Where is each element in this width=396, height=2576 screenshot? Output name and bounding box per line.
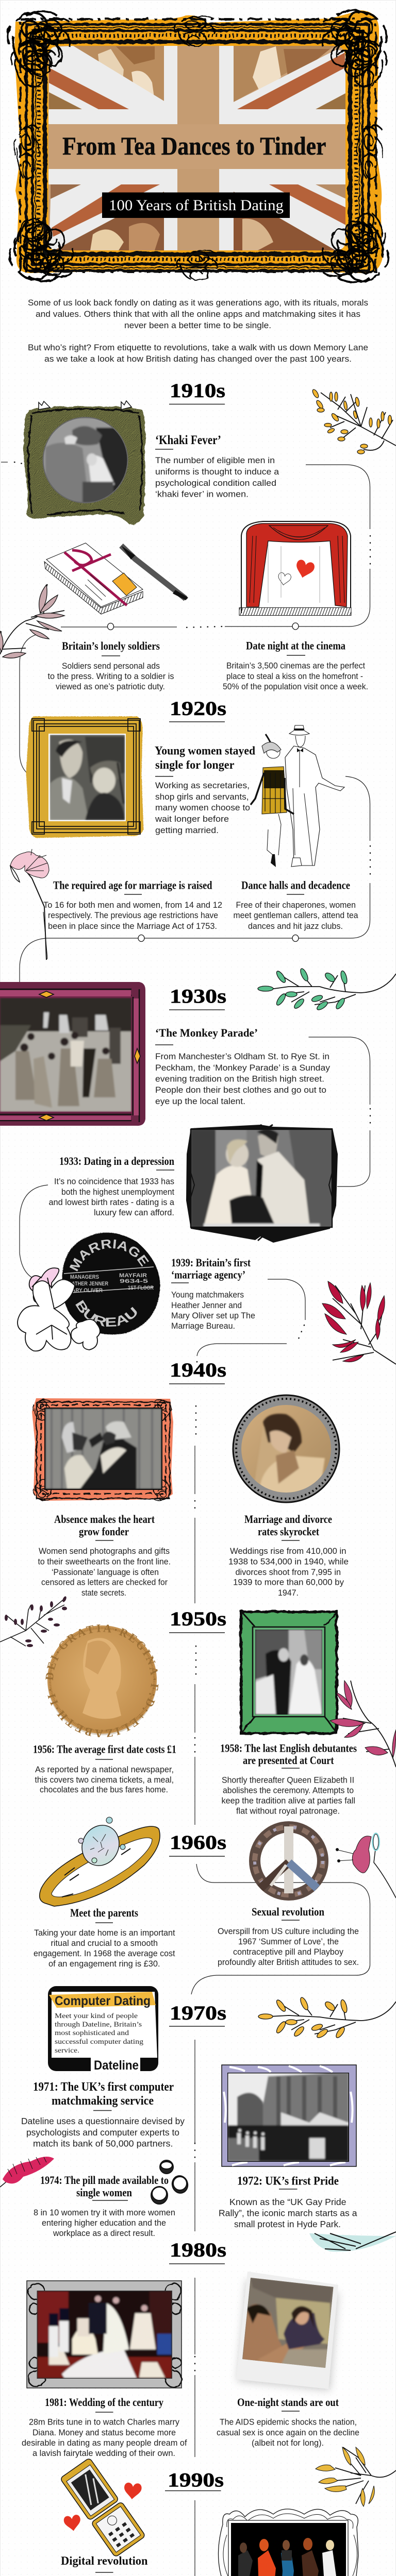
text: marriage and divorce rates [228, 1513, 349, 1598]
text: Britain's first marriage agency: 1939: Britain’s first [171, 1256, 251, 1269]
text: Britain's first marriage agency: Heather Jenner and [171, 1301, 242, 1310]
computer dating advert: successful computer dating [55, 2038, 143, 2045]
text: The Monkey Parade: evening tradition on the British high street. [155, 1075, 324, 1084]
timeline connector 1980s [194, 2278, 195, 2457]
text: one-night stands: (albeit not for long). [252, 2438, 324, 2448]
photo frame: Dating in a depression [186, 1125, 338, 1243]
decade heading 1950s: 1950s [170, 1608, 226, 1630]
text: 1972 first Pride [219, 2174, 357, 2229]
text: 1972 first Pride: 1972: UK’s first Pride [237, 2174, 339, 2188]
text: sexual revolution: profoundly alter British attitudes to sex. [218, 1958, 359, 1967]
text: meet the parents: Meet the parents [70, 1906, 138, 1919]
Union Jack flag panel [48, 44, 346, 250]
section: 1910s [0, 380, 396, 772]
text: Britain's first marriage agency: Marriage Bureau. [171, 1321, 235, 1331]
text: sexual revolution [218, 1905, 359, 1967]
section: 1930s [0, 968, 396, 1369]
text: marriage and divorce rates: Marriage and divorce [244, 1513, 332, 1526]
text: 1958 last debutantes: flat without royal patronage. [236, 1806, 340, 1816]
intro text: never been a better time to be single. [124, 321, 271, 330]
text: 1974 the pill: entering higher education and the [42, 2218, 166, 2228]
title: From Tea Dances to Tinder [62, 132, 326, 161]
text: 1933 depression: and lowest birth rates - dating is a [48, 1198, 175, 1207]
section: 1980s [22, 2232, 396, 2458]
text: Britain's lonely soldiers: Britain’s lonely soldiers [62, 639, 160, 652]
text: one-night stands: casual sex is once again on the decline [217, 2428, 359, 2437]
timeline connector 1920s [20, 776, 370, 984]
text: sexual revolution: contraceptive pill and Playboy [233, 1947, 344, 1957]
text: 1981 wedding of the century [22, 2396, 187, 2458]
text: 1958 last debutantes: 1958: The last English debutantes [220, 1741, 357, 1755]
intro text: Some of us look back fondly on dating as it was generations ago, with its rituals, morals [28, 298, 368, 308]
text: absence makes the heart: grow fonder [79, 1525, 129, 1538]
illustration: Marriage Bureau sign with flowers: MARY OLIVER [68, 1287, 103, 1294]
text: absence makes the heart: state secrets. [81, 1588, 126, 1598]
text: Young women stayed single: wait longer before [155, 815, 229, 824]
text: meet the parents: ritual and crucial to a smooth [51, 1939, 158, 1948]
text: marriage and divorce rates: 1939 to more than 60,000 by [233, 1578, 344, 1587]
photo: polaroid car conversation [236, 2272, 338, 2391]
text: 1956 first date: chocolates and the bus fares home. [40, 1785, 168, 1794]
text: Date night at the cinema: Date night at the cinema [246, 639, 345, 652]
text: Date night at the cinema: place to steal a kiss on the homefront - [226, 672, 363, 681]
text: Britain's lonely soldiers: viewed as one’s patriotic duty. [56, 682, 165, 691]
text: meet the parents [34, 1906, 175, 1969]
text: The Monkey Parade [155, 1026, 331, 1106]
icon: pink flower and bud [336, 1833, 396, 1898]
text: marriage age raised [43, 879, 222, 931]
photo frame: green debutante [240, 1611, 336, 1733]
text: marriage and divorce rates: Weddings rise from 410,000 in [230, 1547, 346, 1556]
intro text: But who’s right? From etiquette to revolutions, take a walk with us down Memory Lane [28, 343, 368, 352]
text: Britain's lonely soldiers [47, 639, 174, 691]
subtitle banner: 100 Years of British Dating [109, 197, 284, 214]
text: one-night stands: One-night stands are out [237, 2396, 339, 2409]
text: Khaki Fever: psychological condition called [155, 479, 276, 488]
illustration: cinema curtains [239, 521, 351, 615]
text: marriage age raised: The required age for marriage is raised [53, 879, 212, 891]
text: marriage and divorce rates: 1938 to 534,000 in 1940, while [228, 1557, 349, 1566]
text: 1958 last debutantes: Shortly thereafter Queen Elizabeth II [222, 1775, 354, 1785]
text: 1981 wedding of the century: Diana. Money and status become more [32, 2428, 176, 2437]
section: 1920s [10, 698, 370, 984]
icon: yellow branch [311, 388, 396, 454]
text: Date night at the cinema: Britain’s 3,500 cinemas are the perfect [226, 662, 365, 671]
text: dance halls: dances and hit jazz clubs. [248, 922, 343, 931]
text: The Monkey Parade: People don their best clothes and go out to [155, 1086, 326, 1095]
text: 1981 wedding of the century: a lavish fairytale wedding of their own. [32, 2449, 175, 2458]
text: sexual revolution: 1967 ‘Summer of Love’, the [238, 1937, 339, 1946]
text: Young women stayed single: single for longer [155, 758, 234, 771]
text: dance halls: meet gentleman callers, attend tea [233, 911, 358, 920]
text: marriage age raised: To 16 for both men and women, from 14 and 12 [43, 901, 222, 910]
text: absence makes the heart: Absence makes the heart [54, 1513, 155, 1526]
photo frame: Spice Girls [219, 2509, 360, 2576]
timeline connector 1910s [1, 462, 370, 772]
text: 1971 computer matchmaking [21, 2080, 185, 2148]
text: Young women stayed single: Working as secretaries, [155, 781, 250, 790]
section: 1960s [34, 1817, 396, 1994]
decade heading 1970s: 1970s [170, 2002, 226, 2024]
intro text: and values. Others think that with all the online apps and matchmaking sites it has [36, 310, 360, 319]
icon: small dark branch [0, 1596, 67, 1647]
computer dating advert: Meet your kind of people [55, 2012, 138, 2020]
text: 1971 computer matchmaking: psychologists and computer experts to [26, 2127, 179, 2138]
photo frame: Monkey Parade [0, 982, 145, 1126]
text: dance halls: Dance halls and decadence [241, 879, 350, 891]
icon: crimson branch [322, 1281, 396, 1364]
illustration: engagement ring [40, 1817, 160, 1906]
text: 1972 first Pride: small protest in Hyde Park. [234, 2219, 341, 2229]
text: marriage and divorce rates: 1947. [278, 1588, 299, 1598]
text: Britain's first marriage agency [171, 1256, 255, 1331]
illustration: Marriage Bureau sign with flowers: HEATHER JENNER [65, 1281, 108, 1287]
photo frame: Khaki Fever [23, 401, 145, 524]
decade heading 1910s: 1910s [170, 380, 225, 402]
text: 1958 last debutantes [220, 1741, 357, 1816]
text: Young women stayed single: shop girls and servants, [155, 792, 249, 802]
text: digital revolution: Digital revolution [61, 2554, 148, 2567]
icon: yellow branch 1970s [258, 1996, 396, 2039]
decade heading 1990s: 1990s [168, 2469, 224, 2492]
text: 1956 first date: this covers two cinema tickets, a meal, [35, 1775, 174, 1785]
text: 1981 wedding of the century: 1981: Wedding of the century [45, 2396, 163, 2409]
icon: pink leaf branch [0, 584, 64, 658]
text: Britain's first marriage agency: ‘marriage agency’ [171, 1268, 245, 1281]
computer dating advert: service. [55, 2046, 79, 2054]
text: one-night stands: The AIDS epidemic shocks the nation, [220, 2417, 357, 2427]
text: The Monkey Parade: eye up the local talent. [155, 1097, 245, 1106]
section: 1970s [0, 1986, 396, 2238]
text: 1981 wedding of the century: 28m Brits tune in to watch Charles marry [29, 2417, 180, 2427]
text: The Monkey Parade: Peckham, the ‘Monkey Parade’ is a Sunday [155, 1063, 331, 1073]
hero: ornate gold frame with Union Jack [7, 10, 388, 282]
text: sexual revolution: Sexual revolution [252, 1905, 324, 1918]
timeline connector 1960s [191, 1864, 370, 1994]
computer dating advert [48, 1986, 158, 2073]
text: Britain's lonely soldiers: Soldiers send personal ads [62, 662, 160, 671]
illustration: flip phone and hearts [60, 2457, 145, 2557]
text: marriage and divorce rates: divorces shoot from 7,995 in [235, 1568, 341, 1577]
text: Khaki Fever: ‘khaki fever’ in women. [155, 489, 249, 499]
photo frame: 1972 Pride march [222, 2065, 356, 2166]
icon: blue-green leaf branch [309, 2232, 396, 2252]
text: 1971 computer matchmaking: matchmaking service [52, 2094, 154, 2108]
illustration: Marriage Bureau sign with flowers: 1ST FLOOR [128, 1285, 154, 1291]
icon: contraceptive pills [151, 2160, 190, 2204]
decade heading 1920s: 1920s [170, 698, 226, 720]
text: The Monkey Parade: From Manchester’s Oldham St. to Rye St. in [155, 1052, 329, 1061]
text: 1958 last debutantes: abolishes the ceremony. Attempts to [223, 1786, 354, 1795]
illustration: love letters and pen [44, 543, 188, 614]
text: absence makes the heart: to their sweethearts on the front line. [38, 1557, 171, 1566]
text: 1958 last debutantes: keep the tradition alive at parties fall [222, 1796, 355, 1805]
illustration: Marriage Bureau sign with flowers: MAYFAIR [119, 1273, 147, 1279]
intro text: as we take a look at how British dating has changed over the past 100 years. [44, 354, 352, 364]
illustration: Marriage Bureau sign with flowers: BUREAU [75, 1300, 137, 1327]
computer dating advert: Dateline [94, 2058, 139, 2073]
photo frame: sepia oval portrait [233, 1395, 339, 1502]
text: Britain's lonely soldiers: to the press. Writing to a soldier is [47, 672, 174, 681]
text: absence makes the heart: censored as letters are checked for [41, 1578, 168, 1587]
text: Britain's first marriage agency: Young matchmakers [171, 1290, 244, 1299]
text: marriage and divorce rates: rates skyrocket [258, 1525, 320, 1538]
text: 1956 first date [33, 1742, 176, 1794]
text: 1933 depression: It’s no coincidence that 1933 has [54, 1177, 174, 1186]
subtitle banner [102, 193, 290, 218]
section: 1940s [32, 1359, 349, 1603]
text: one-night stands [217, 2396, 359, 2448]
text: 1974 the pill: workplace as a direct result. [53, 2229, 155, 2238]
timeline connector 1950s [195, 1646, 196, 1825]
section: 1990s [26, 2447, 396, 2576]
text: 1974 the pill: single women [76, 2186, 132, 2199]
text: 1933 depression: luxury few can afford. [94, 1208, 174, 1217]
text: 1981 wedding of the century: desirable in dating as many people dream of [22, 2438, 187, 2448]
decade heading 1960s: 1960s [170, 1832, 226, 1854]
illustration: 1920s flapper couple [251, 725, 344, 867]
text: 1974 the pill [34, 2174, 175, 2238]
photo frame: royal wedding [27, 2281, 182, 2388]
text: marriage age raised: been in place since the Marriage Act of 1753. [48, 922, 217, 931]
text: Khaki Fever: ‘Khaki Fever’ [155, 433, 221, 447]
text: 1972 first Pride: Rally”, the iconic march starts as a [219, 2208, 357, 2218]
text: Date night at the cinema [223, 639, 368, 691]
text: dance halls: Free of their chaperones, women [236, 901, 356, 910]
text: Young women stayed single [155, 744, 255, 835]
text: 1933 depression: both the highest unemployment [61, 1188, 174, 1197]
text: Khaki Fever: The number of eligible men in [155, 456, 275, 465]
text: Date night at the cinema: 50% of the population visit once a week. [223, 682, 368, 691]
decade heading 1930s: 1930s [170, 985, 226, 1008]
text: 1933 depression: 1933: Dating in a depression [59, 1155, 174, 1167]
section: 1950s [0, 1596, 396, 1845]
text: 1974 the pill: 1974: The pill made available to [40, 2174, 169, 2187]
text: marriage age raised: respectively. The previous age restrictions have [48, 911, 218, 920]
illustration: Marriage Bureau sign with flowers [17, 1232, 161, 1352]
icon: pink fern sprig [0, 2157, 54, 2187]
text: absence makes the heart: ‘Passionate’ language is often [52, 1568, 159, 1577]
text: 1971 computer matchmaking: Dateline uses a questionnaire devised by [21, 2116, 185, 2126]
timeline connector 1990s [194, 2500, 195, 2576]
text: dance halls [233, 879, 358, 931]
text: meet the parents: Taking your date home is an important [34, 1928, 175, 1938]
illustration: Marriage Bureau sign with flowers: MARRIAGE [69, 1240, 149, 1272]
text: 1958 last debutantes: are presented at Court [243, 1754, 334, 1767]
text: absence makes the heart: Women send photographs and gifts [39, 1547, 170, 1556]
text: Young women stayed single: Young women stayed [155, 744, 255, 757]
text: Young women stayed single: many women choose to [155, 803, 250, 812]
ornamental frame strokes [7, 10, 388, 282]
icon: gold leaf branch [316, 2447, 396, 2506]
icon: green branch [258, 968, 396, 1011]
text: 1956 first date: 1956: The average first date costs £1 [33, 1742, 176, 1756]
timeline connector 1930s [20, 1037, 370, 1370]
icon: pink leaf vine [330, 1681, 396, 1767]
decade heading 1980s: 1980s [170, 2239, 226, 2261]
illustration: peace sign collage [255, 1826, 323, 1895]
computer dating advert: Computer Dating [55, 1994, 151, 2008]
text: Khaki Fever [155, 433, 279, 499]
photo frame: couple in gold [26, 716, 143, 838]
timeline connector 1970s [194, 2040, 195, 2231]
text: absence makes the heart [38, 1513, 171, 1598]
illustration: Marriage Bureau sign with flowers: 9634-5 [120, 1278, 148, 1284]
text: sexual revolution: Overspill from US culture including the [218, 1927, 359, 1936]
text: Young women stayed single: getting married. [155, 826, 219, 835]
computer dating advert: most sophisticated and [55, 2029, 129, 2037]
intro text [28, 298, 368, 364]
gold frame background [14, 10, 383, 274]
computer dating advert: through Dateline, Britain’s [55, 2021, 142, 2028]
photo frame: gas mask kiss [32, 1398, 173, 1501]
timeline connector 1940s [195, 1406, 196, 1603]
text: Britain's first marriage agency: Mary Oliver set up The [171, 1311, 255, 1320]
text: Khaki Fever: uniforms is thought to induce a [155, 467, 279, 477]
text: 1974 the pill: 8 in 10 women try it with more women [34, 2208, 175, 2217]
text: 1972 first Pride: Known as the “UK Gay Pride [229, 2197, 346, 2207]
illustration: Marriage Bureau sign with flowers: MANAGERS [70, 1274, 99, 1280]
icon: gold sovereign coin: DEI·GRATIA·REGINA·F:D:+ELIZABETH·II· [45, 1624, 159, 1737]
decade heading 1940s: 1940s [170, 1359, 226, 1381]
text: meet the parents: of an engagement ring is £30. [48, 1959, 160, 1969]
text: 1971 computer matchmaking: match its bank of 50,000 partners. [33, 2138, 173, 2148]
text: 1933 depression [48, 1155, 175, 1217]
text: meet the parents: engagement. In 1968 the average cost [34, 1949, 175, 1958]
text: The Monkey Parade: ‘The Monkey Parade’ [155, 1026, 258, 1039]
text: 1956 first date: As reported by a national newspaper, [35, 1765, 174, 1774]
icon: pink lily flower [10, 849, 49, 960]
text: 1971 computer matchmaking: 1971: The UK’s first computer [33, 2080, 174, 2094]
